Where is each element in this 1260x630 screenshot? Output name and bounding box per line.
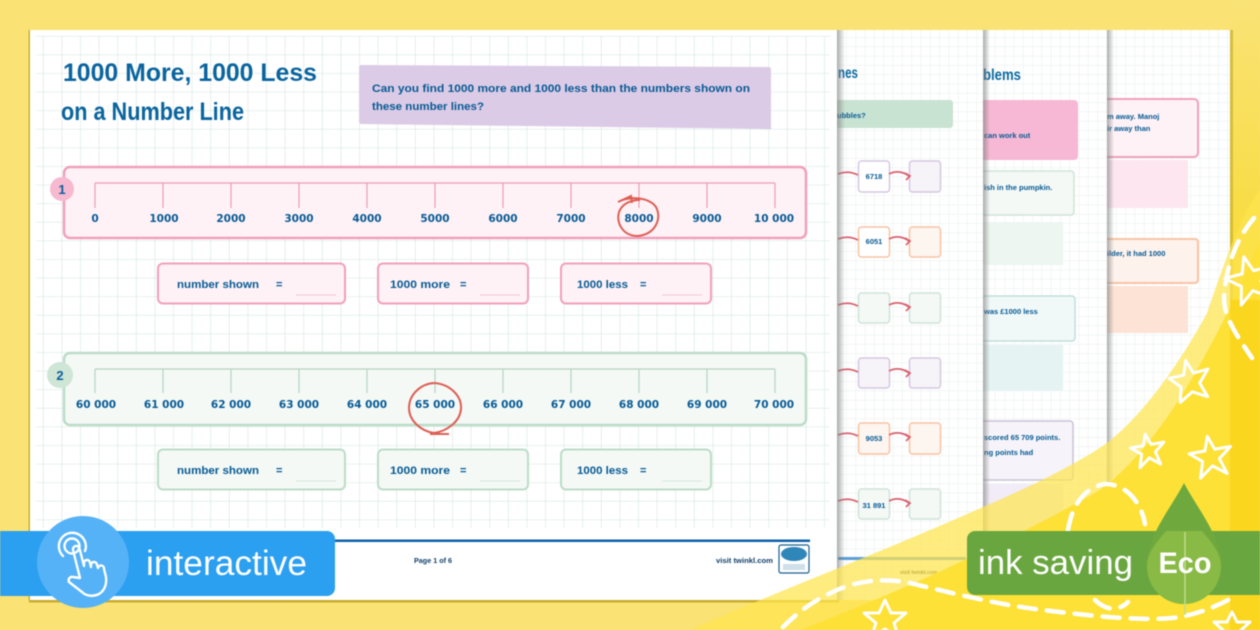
question text: ir away than bbox=[1107, 124, 1151, 133]
page 2: number chains bbox=[830, 30, 983, 600]
answer boxes row 1: number shown bbox=[177, 279, 259, 291]
purple question box bbox=[970, 421, 1073, 480]
chain numbers: 6718 bbox=[866, 172, 882, 181]
axis 1 bbox=[95, 183, 775, 208]
badge 1: 1 bbox=[58, 182, 66, 197]
question banner bbox=[359, 65, 771, 129]
label: interactive: interactive bbox=[146, 544, 307, 583]
labels 2: 68 000 bbox=[619, 399, 659, 411]
labels 2: 61 000 bbox=[144, 399, 184, 411]
badge 2: 2 bbox=[56, 368, 64, 383]
instruction text: ubbles? bbox=[837, 111, 866, 120]
labels 1: 10 000 bbox=[754, 213, 794, 225]
answer boxes row 2: = bbox=[460, 465, 466, 477]
page title fragment: nes bbox=[838, 65, 858, 82]
title: 1000 More, 1000 Less bbox=[63, 59, 317, 87]
badge 1 bbox=[50, 177, 74, 201]
answer boxes row 1: = bbox=[640, 279, 646, 291]
labels 2 bbox=[76, 399, 794, 411]
red circle on 65 000 bbox=[409, 383, 461, 434]
box chains bbox=[858, 161, 940, 519]
answer boxes row 2: = bbox=[276, 465, 282, 477]
purple answer box bbox=[970, 484, 1063, 534]
question text: ilder, it had 1000 bbox=[1107, 249, 1165, 258]
label: ink saving: ink saving bbox=[978, 544, 1133, 582]
labels 2: 66 000 bbox=[483, 399, 523, 411]
icon: eco leaf bbox=[1147, 483, 1221, 615]
chain numbers: 6051 bbox=[866, 237, 882, 246]
page 2 footer bbox=[838, 557, 966, 576]
answer boxes row 1: 1000 more bbox=[390, 279, 450, 291]
badge 2 bbox=[47, 362, 73, 388]
chain numbers: 31 891 bbox=[863, 501, 885, 510]
answer boxes row 1: 1000 less bbox=[577, 279, 628, 291]
labels 1: 8000 bbox=[624, 213, 654, 225]
axis 2 bbox=[95, 369, 775, 393]
labels 2: 65 000 bbox=[415, 399, 455, 411]
green instruction box bbox=[830, 100, 953, 128]
icon: touch hand bbox=[37, 516, 129, 608]
question text: m away. Manoj bbox=[1107, 112, 1159, 121]
question text: ish in the pumpkin. bbox=[984, 183, 1052, 192]
labels 1: 0 bbox=[91, 213, 99, 225]
badge: ink saving eco bbox=[967, 483, 1260, 615]
labels 2: 60 000 bbox=[76, 399, 116, 411]
question text: ng points had bbox=[984, 448, 1034, 457]
red circle on 8000 bbox=[618, 196, 658, 236]
labels 1: 1000 bbox=[149, 213, 179, 225]
page shadows bbox=[837, 30, 1114, 600]
labels 1: 7000 bbox=[556, 213, 586, 225]
labels 1: 3000 bbox=[284, 213, 314, 225]
answer boxes row 2: = bbox=[640, 465, 646, 477]
teal question box bbox=[970, 296, 1075, 341]
answer boxes row 1 bbox=[158, 264, 711, 304]
teal answer box bbox=[970, 345, 1063, 391]
dashed decoration bbox=[783, 218, 1254, 627]
answer boxes row 2: 1000 less bbox=[577, 465, 628, 477]
labels 1: 2000 bbox=[216, 213, 246, 225]
answer boxes row 1: = bbox=[460, 279, 466, 291]
panel: number line 1 bbox=[50, 167, 806, 238]
labels 1: 9000 bbox=[692, 213, 722, 225]
page 4: word problems continued bbox=[1095, 30, 1230, 600]
question text bbox=[983, 131, 1060, 457]
labels 2: 64 000 bbox=[347, 399, 387, 411]
page 3: problems bbox=[970, 30, 1107, 600]
answer boxes row 2: 1000 more bbox=[390, 465, 450, 477]
labels 2: 69 000 bbox=[687, 399, 727, 411]
answer boxes row 2 bbox=[158, 450, 711, 490]
labels 1: 4000 bbox=[352, 213, 382, 225]
footer: visit twinkl.com bbox=[716, 556, 773, 565]
chain numbers bbox=[863, 172, 885, 510]
chain numbers: 9053 bbox=[866, 434, 882, 443]
pink answer box bbox=[1095, 160, 1188, 208]
page 2 footer: visit twinkl.com bbox=[900, 570, 938, 576]
decorative stars bbox=[864, 251, 1260, 630]
page title fragment: blems bbox=[983, 67, 1021, 84]
labels 2: 63 000 bbox=[279, 399, 319, 411]
labels 2: 70 000 bbox=[754, 399, 794, 411]
labels 2: 62 000 bbox=[211, 399, 251, 411]
question banner: Can you find 1000 more and 1000 less than the numbers shown on bbox=[372, 83, 750, 95]
grid paper bbox=[36, 36, 830, 528]
green answer box bbox=[970, 222, 1063, 265]
yellow wave overlay bbox=[690, 190, 1260, 630]
page 1: worksheet bbox=[30, 30, 837, 600]
question text: was £1000 less bbox=[983, 307, 1038, 316]
green question box bbox=[970, 171, 1074, 215]
labels 2: 67 000 bbox=[551, 399, 591, 411]
icon: eco leaf: Eco bbox=[1158, 547, 1212, 580]
orange question box bbox=[1095, 239, 1198, 283]
question text: scored 65 709 points. bbox=[984, 433, 1060, 442]
footer bbox=[330, 540, 810, 573]
panel: number line 2 bbox=[47, 353, 806, 434]
chain arrows bbox=[838, 172, 910, 507]
footer: Page 1 of 6 bbox=[414, 556, 452, 565]
logo bbox=[779, 545, 809, 573]
pink intro box bbox=[970, 100, 1078, 160]
answer boxes row 2: number shown bbox=[177, 465, 259, 477]
labels 1 bbox=[91, 213, 794, 225]
badge: interactive bbox=[0, 516, 335, 608]
orange answer box bbox=[1095, 286, 1188, 333]
pink question box bbox=[1095, 99, 1198, 157]
title: on a Number Line bbox=[61, 98, 244, 126]
question text bbox=[1107, 112, 1165, 258]
question banner: these number lines? bbox=[372, 101, 484, 113]
title bbox=[61, 59, 317, 126]
question text: can work out bbox=[984, 131, 1031, 140]
labels 1: 6000 bbox=[488, 213, 518, 225]
answer boxes row 1: = bbox=[276, 279, 282, 291]
labels 1: 5000 bbox=[420, 213, 450, 225]
